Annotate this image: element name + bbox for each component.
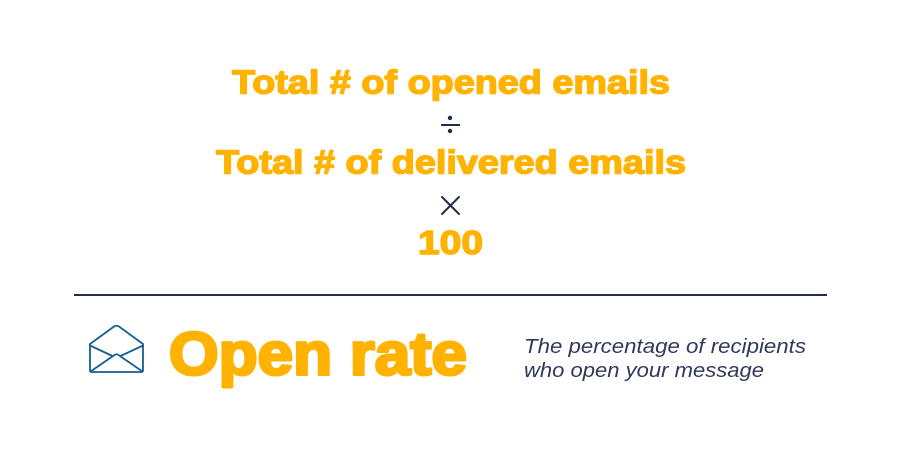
description text (524, 336, 806, 382)
divider line (74, 294, 827, 296)
formula: delivered emails: Total # of delivered emails (216, 144, 686, 180)
icon: open envelope (90, 326, 143, 372)
heading: open rate: Open rate (169, 320, 467, 388)
formula: opened emails: Total # of opened emails (232, 64, 670, 100)
icon: division sign (441, 116, 460, 133)
description text: who open your message (524, 360, 764, 382)
description text: The percentage of recipients (524, 336, 806, 358)
formula: 100: 100 (418, 224, 483, 261)
icon: multiplication sign (442, 197, 459, 214)
